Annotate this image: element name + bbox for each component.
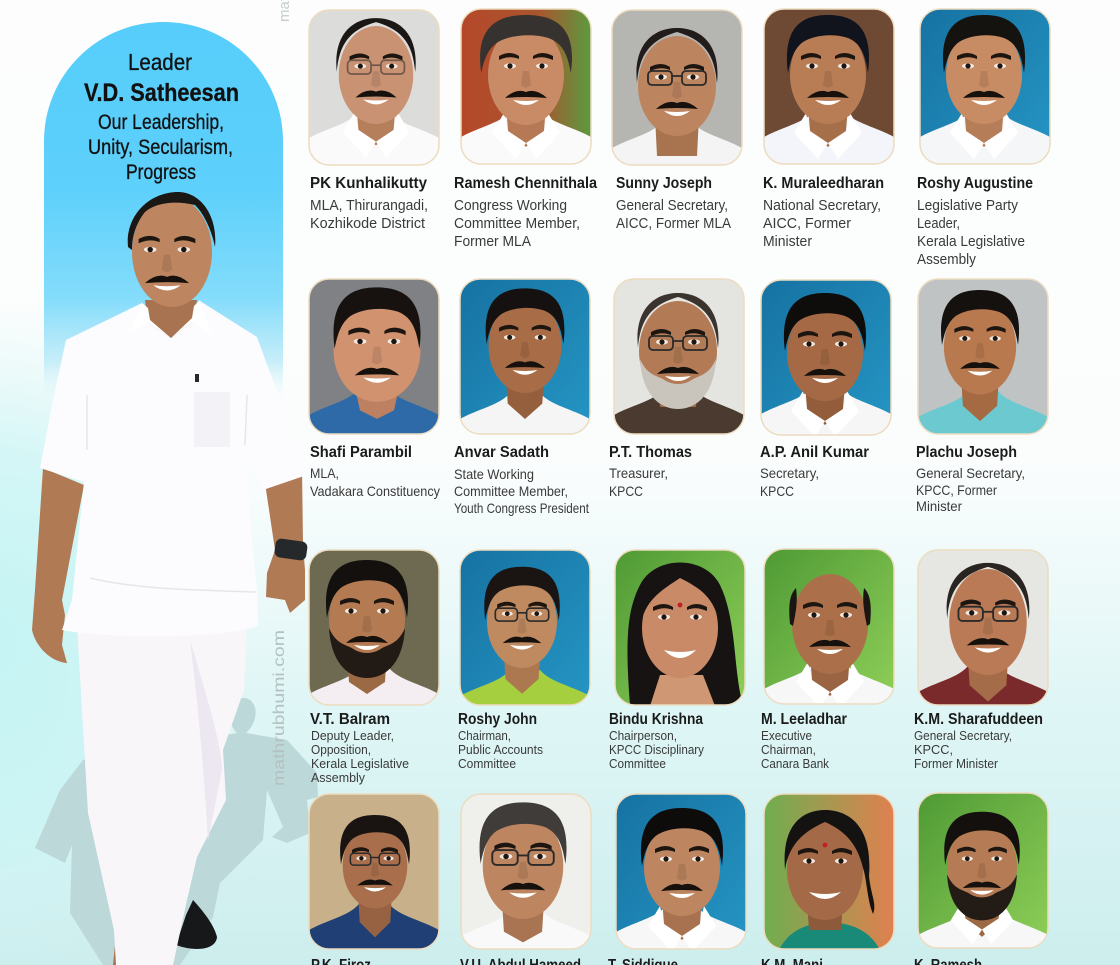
name: K. Muraleedharan [763,175,884,192]
name: Anvar Sadath [454,444,549,461]
role [616,197,731,232]
photo [309,794,439,958]
card: V.U. Abdul Hameed [460,794,591,965]
role: KPCC [609,483,643,499]
leader heading text: V.D. Satheesan [84,79,239,107]
role: KPCC, Former [916,482,997,498]
role: Kerala Legislative [311,756,409,771]
role: Executive [761,728,812,743]
figure shadow [35,698,318,965]
photo [764,794,894,950]
leader heading text: Progress [126,161,196,184]
watch [274,538,308,561]
card: A.P. Anil Kumar [760,280,891,499]
role: Committee [458,756,516,771]
role: Assembly [917,251,976,268]
role: Minister [916,498,962,514]
role: AICC, Former MLA [616,215,731,232]
role: Chairperson, [609,728,677,743]
name: Ramesh Chennithala [454,175,597,192]
role: Committee Member, [454,215,580,232]
role: Public Accounts [458,742,543,757]
role: Treasurer, [609,465,668,481]
role: Former Minister [914,756,999,771]
leader heading text: Leader [128,49,192,75]
role: Committee [609,756,666,771]
card: K.M. Sharafuddeen [914,550,1048,771]
photo [461,794,591,964]
photo [920,9,1050,165]
blue arch backdrop [44,22,283,400]
card: Plachu Joseph [916,279,1048,514]
role: General Secretary, [916,465,1025,481]
role: KPCC [760,483,794,499]
role: General Secretary, [914,728,1012,743]
photo [615,550,745,706]
photo [918,279,1048,445]
head [128,192,215,338]
role: Former MLA [454,233,531,250]
role: MLA, [310,465,339,481]
role: KPCC Disciplinary [609,742,704,757]
left arm [32,468,84,663]
card: Shafi Parambil [309,279,440,499]
name: Bindu Krishna [609,711,703,728]
role: Minister [763,233,812,250]
role [609,728,704,771]
card: Sunny Joseph [612,10,742,232]
name: M. Leeladhar [761,711,847,728]
card: T. Siddique [608,794,746,965]
name: Shafi Parambil [310,444,412,461]
name: Plachu Joseph [916,444,1017,461]
role [916,465,1025,514]
role: MLA, Thirurangadi, [310,197,428,214]
leader heading text: Our Leadership, [98,111,224,134]
mundu [77,625,247,965]
role: Committee Member, [454,483,568,499]
name: P.T. Thomas [609,444,692,461]
watermark: side: mathrubhumi.com [271,630,288,786]
role: Kerala Legislative [917,233,1025,250]
card: K. Muraleedharan [763,9,894,250]
card: Roshy Augustine [917,9,1050,268]
pen [195,374,199,382]
role [761,728,829,771]
role: State Working [454,466,534,482]
role [310,197,428,232]
role: National Secretary, [763,197,881,214]
name: Sunny Joseph [616,175,712,192]
role: Opposition, [311,742,371,757]
photo [764,549,894,717]
role: Leader, [917,215,960,232]
role [917,197,1025,268]
role [454,466,589,516]
photo [460,550,590,724]
role [763,197,881,250]
card: Roshy John [458,550,590,771]
role: Kozhikode District [310,215,426,232]
photo [309,550,439,722]
card: P.K. Firoz [309,794,439,965]
photo [764,9,894,165]
role: Chairman, [458,728,511,743]
role [311,728,409,785]
photo [460,279,590,447]
role: Assembly [311,770,365,785]
photo [761,280,891,442]
role: Legislative Party [917,197,1018,214]
card: V.T. Balram [309,550,439,785]
role: Vadakara Constituency [310,483,440,499]
role: KPCC, [914,742,953,757]
role [760,465,819,499]
card: P.T. Thomas [609,279,744,499]
name: V.T. Balram [310,711,390,728]
role: AICC, Former [763,215,851,232]
role [609,465,668,499]
card: PK Kunhalikutty [309,10,439,232]
photo [616,794,746,960]
card: M. Leeladhar [761,549,894,771]
photo [461,9,591,165]
photo [612,10,742,176]
card: Anvar Sadath [454,279,590,516]
name: K.M. Sharafuddeen [914,711,1043,728]
photo [309,10,439,166]
right arm [265,468,305,613]
leader heading text [84,49,239,184]
name: Roshy John [458,711,537,728]
card: Ramesh Chennithala [454,9,597,250]
role: Youth Congress President [454,500,589,516]
shirt [40,301,305,636]
name: PK Kunhalikutty [310,175,427,192]
role: General Secretary, [616,197,728,214]
photo [309,279,439,443]
other foot [113,945,135,965]
photo [614,279,744,443]
shoe [176,900,217,949]
card: K.M. Mani [761,794,894,965]
leader heading text: Unity, Secularism, [88,136,233,159]
name: A.P. Anil Kumar [760,444,869,461]
card: K. Ramesh [914,793,1048,965]
photo [918,793,1048,963]
role [914,728,1012,771]
role [454,197,580,250]
card: Bindu Krishna [609,550,745,771]
role: Congress Working [454,197,567,214]
photo [918,550,1048,720]
role: Secretary, [760,465,819,481]
name: Roshy Augustine [917,175,1033,192]
role [310,465,440,499]
panel: leader arch [44,22,283,400]
role: Chairman, [761,742,816,757]
leader figure [32,192,308,965]
left background tint [0,300,230,965]
role: Canara Bank [761,756,829,771]
role: Deputy Leader, [311,728,394,743]
role [458,728,543,771]
